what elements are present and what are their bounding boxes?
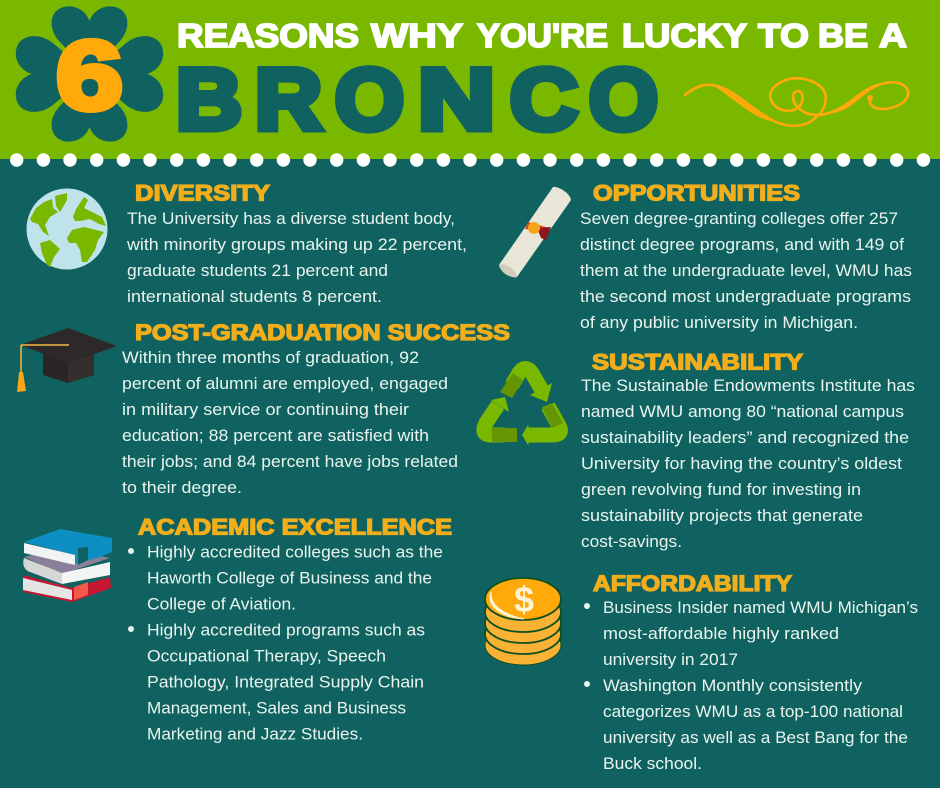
flourish ornament bbox=[685, 78, 908, 126]
title word: BRONCO: O bbox=[589, 52, 658, 148]
title word: BRONCO bbox=[176, 52, 658, 148]
heading: academic excellence: ACADEMIC EXCELLENCE bbox=[138, 514, 452, 540]
text: post-graduation body: education; 88 percent are satisfied with bbox=[122, 426, 429, 445]
text: sustainability body: cost-savings. bbox=[581, 532, 682, 551]
text: opportunities body: of any public university in Michigan. bbox=[580, 313, 858, 332]
title word: BRONCO: B bbox=[176, 52, 242, 148]
heading: post-graduation success: POST-GRADUATION SUCCESS bbox=[135, 320, 510, 345]
title line: LUCKY bbox=[622, 17, 747, 54]
icon: four-leaf clover with number 6: 6 bbox=[56, 21, 123, 130]
panel: sustainability bbox=[581, 350, 915, 551]
icon: globe bbox=[26, 188, 108, 270]
icon: graduation cap bbox=[17, 328, 117, 392]
text: academic excellence bullets: Highly accredited colleges such as the bbox=[147, 542, 443, 562]
text: diversity body bbox=[126, 209, 467, 306]
panel: affordability bbox=[584, 571, 918, 773]
text: affordability bullets: Business Insider named WMU Michigan’s bbox=[603, 598, 918, 617]
text: sustainability body: The Sustainable Endowments Institute has bbox=[581, 376, 915, 395]
icon: stack of coins bbox=[485, 578, 561, 665]
panel: diversity bbox=[126, 180, 467, 306]
title line: A bbox=[879, 17, 907, 54]
icon: stack of books bbox=[23, 529, 112, 602]
text: affordability bullets: categorizes WMU as a top-100 national bbox=[603, 702, 903, 721]
text: opportunities body: the second most undergraduate programs bbox=[580, 287, 911, 306]
text: diversity body: The University has a diverse student body, bbox=[127, 209, 455, 228]
text: post-graduation body: in military service or continuing their bbox=[122, 400, 409, 419]
title word: BRONCO: R bbox=[255, 52, 322, 148]
text: sustainability body bbox=[581, 376, 915, 551]
icon: stack of coins: $ bbox=[514, 579, 534, 620]
title line: YOU'RE bbox=[477, 17, 608, 54]
icon: four-leaf clover with number 6 bbox=[16, 6, 163, 142]
text: academic excellence bullets: Haworth College of Business and the bbox=[147, 568, 432, 588]
text: sustainability body: University for having the country’s oldest bbox=[581, 454, 902, 473]
text: opportunities body bbox=[580, 209, 912, 332]
text: affordability bullets: Washington Monthly consistently bbox=[603, 676, 863, 695]
icon: diploma scroll bbox=[499, 187, 571, 277]
heading: opportunities: OPPORTUNITIES bbox=[593, 180, 800, 206]
text: affordability bullets bbox=[584, 598, 918, 773]
text: opportunities body: Seven degree-granting colleges offer 257 bbox=[580, 209, 898, 228]
panel: academic excellence bbox=[128, 514, 452, 744]
title line: BE bbox=[818, 17, 868, 54]
title line: REASONS bbox=[177, 17, 359, 54]
text: academic excellence bullets: Highly accredited programs such as bbox=[147, 620, 425, 640]
text: affordability bullets: university as well as a Best Bang for the bbox=[603, 728, 908, 747]
text: post-graduation body: percent of alumni are employed, engaged bbox=[122, 374, 448, 393]
text: opportunities body: them at the undergraduate level, WMU has bbox=[580, 261, 912, 280]
header band bbox=[0, 0, 940, 159]
text: academic excellence bullets: College of Aviation. bbox=[147, 594, 296, 614]
title word: BRONCO: C bbox=[510, 52, 578, 148]
panel: opportunities bbox=[580, 180, 912, 332]
text: diversity body: with minority groups making up 22 percent, bbox=[126, 235, 467, 254]
text: post-graduation body: to their degree. bbox=[122, 478, 242, 497]
text: academic excellence bullets: Marketing and Jazz Studies. bbox=[147, 724, 363, 744]
title word: BRONCO: O bbox=[335, 52, 404, 148]
title line: WHY bbox=[371, 17, 463, 54]
text: sustainability body: sustainability projects that generate bbox=[581, 506, 863, 525]
panel: post-graduation success bbox=[122, 320, 510, 497]
text: affordability bullets: university in 2017 bbox=[603, 650, 738, 669]
text: opportunities body: distinct degree programs, and with 149 of bbox=[580, 235, 904, 254]
heading: sustainability: SUSTAINABILITY bbox=[592, 350, 803, 374]
text: post-graduation body bbox=[122, 348, 458, 497]
text: academic excellence bullets: Management, Sales and Business bbox=[147, 698, 406, 718]
icon: recycle arrows bbox=[484, 368, 563, 445]
title line bbox=[177, 17, 907, 54]
text: academic excellence bullets: Occupational Therapy, Speech bbox=[147, 646, 386, 666]
dotted divider bbox=[10, 153, 930, 167]
title word: BRONCO: N bbox=[418, 52, 495, 148]
text: post-graduation body: Within three months of graduation, 92 bbox=[122, 348, 419, 367]
text: affordability bullets: Buck school. bbox=[603, 754, 702, 773]
text: affordability bullets: most-affordable highly ranked bbox=[603, 624, 839, 643]
heading: affordability: AFFORDABILITY bbox=[593, 571, 792, 596]
title line: TO bbox=[758, 17, 809, 54]
text: academic excellence bullets bbox=[128, 542, 443, 744]
text: sustainability body: green revolving fund for investing in bbox=[581, 480, 861, 499]
text: academic excellence bullets: Pathology, Integrated Supply Chain bbox=[147, 672, 424, 692]
text: post-graduation body: their jobs; and 84 percent have jobs related bbox=[122, 452, 458, 471]
text: diversity body: graduate students 21 percent and bbox=[127, 261, 388, 280]
heading: diversity: DIVERSITY bbox=[135, 180, 270, 206]
text: sustainability body: sustainability leaders” and recognized the bbox=[581, 428, 909, 447]
text: sustainability body: named WMU among 80 “national campus bbox=[581, 402, 904, 421]
text: diversity body: international students 8 percent. bbox=[127, 287, 382, 306]
